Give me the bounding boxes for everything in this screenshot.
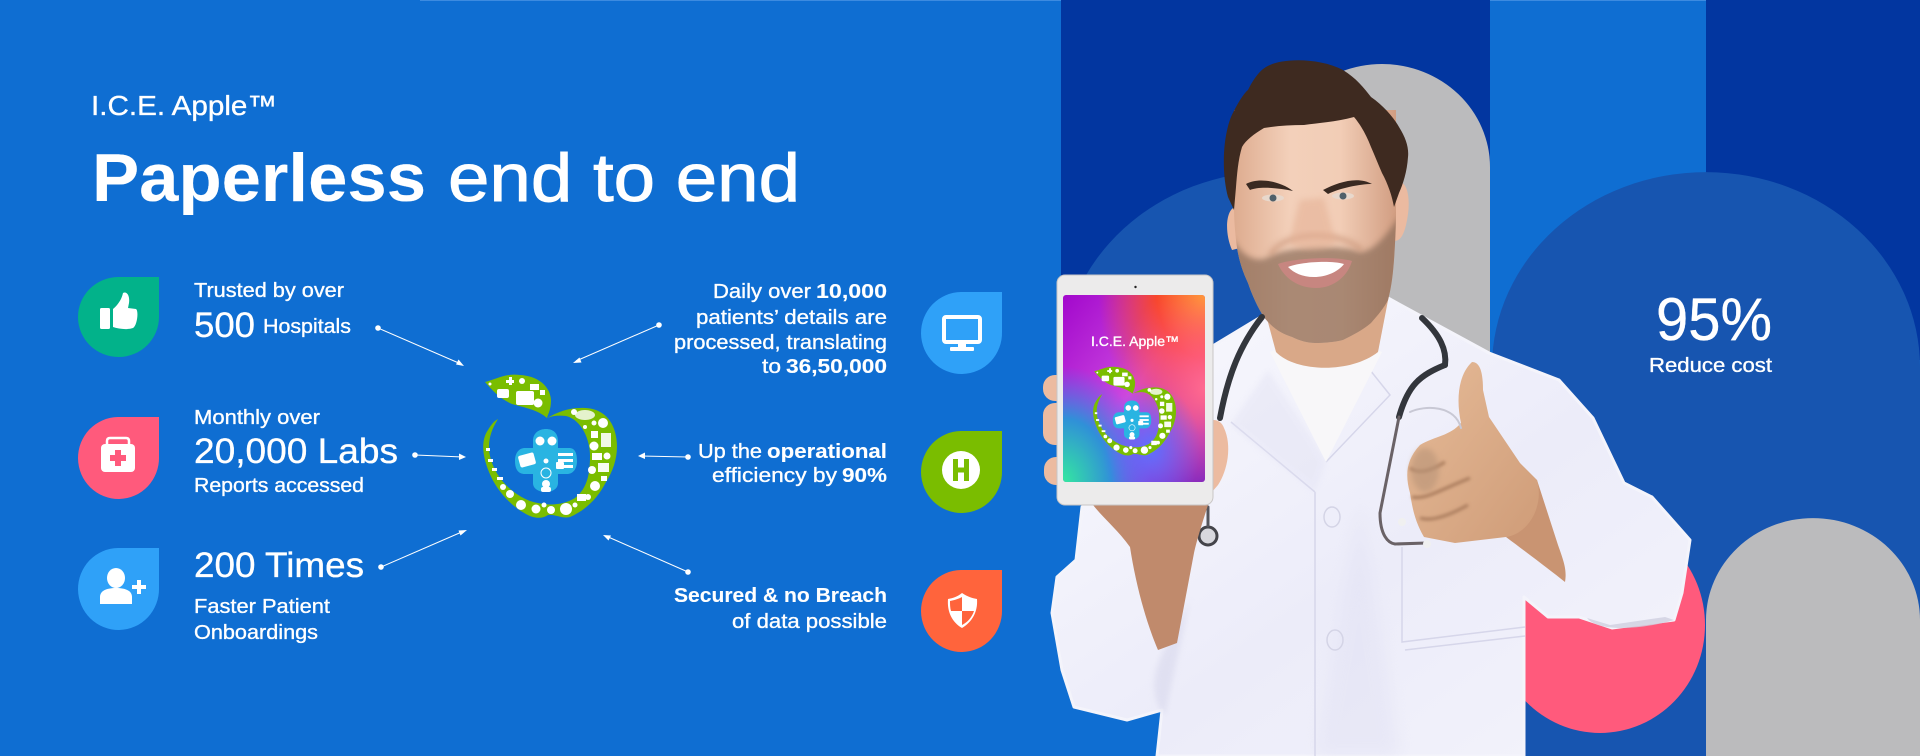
text: operational efficiency: efficiency by: [712, 464, 838, 487]
arrow: labs to apple: [412, 452, 466, 460]
logo: green apple: [483, 375, 617, 518]
text: secured no breach: Secured & no Breach: [674, 584, 887, 607]
text: monthly over 20,000 labs: Reports accessed: [194, 474, 364, 497]
coat: [1052, 298, 1690, 756]
teeth: [1288, 262, 1344, 277]
stat: 95% reduce cost: Reduce cost: [1649, 354, 1772, 377]
arrow: efficiency to apple: [638, 452, 691, 460]
holding forearm: [1093, 505, 1208, 650]
shape: grey arch bottom right: [1706, 518, 1920, 756]
panel: dark blue column right: [1706, 0, 1920, 360]
eyes: [1262, 192, 1354, 202]
text: daily patients processed: 36,50,000: [786, 355, 887, 378]
shape: pink circle: [1495, 517, 1705, 733]
icon: medical kit: [78, 417, 159, 499]
text: trusted by over 500 hospitals: 500: [194, 306, 255, 345]
t-shirt: [1270, 340, 1382, 462]
text: operational efficiency: operational: [767, 440, 887, 463]
icon: monitor: [921, 292, 1002, 374]
tablet title: I.C.E. Apple™: [1091, 333, 1179, 349]
icon: shield: [921, 570, 1002, 652]
arrow: hospitals to apple: [375, 325, 464, 366]
text: daily patients processed: 10,000: [816, 280, 887, 303]
text: daily patients processed: Daily over: [713, 280, 811, 303]
text: daily patients processed: [674, 280, 887, 378]
title: [92, 140, 800, 216]
text: trusted by over 500 hospitals: Trusted by over: [194, 279, 344, 302]
neck: [1262, 290, 1390, 368]
text: trusted by over 500 hospitals: [194, 279, 351, 345]
text: operational efficiency: [698, 440, 887, 487]
text: trusted by over 500 hospitals: Hospitals: [263, 315, 351, 338]
mouth: [1278, 258, 1352, 288]
title: Paperless: [92, 140, 426, 216]
text: operational efficiency: Up the: [698, 440, 762, 463]
shape: medium blue arch behind doctor: [1061, 172, 1488, 480]
title: end to end: [448, 140, 800, 216]
fingers behind tablet: [1043, 375, 1228, 500]
icon: thumbs up: [78, 277, 159, 357]
top highlight strip: [420, 0, 1920, 1]
text: secured no breach: [674, 584, 887, 633]
text: daily patients processed: to: [762, 355, 781, 378]
stubble: [1236, 218, 1396, 343]
hair: [1224, 60, 1408, 210]
arrow: secured to apple: [603, 535, 691, 575]
subtitle: I.C.E. Apple™: [91, 90, 277, 121]
photo: doctor: [1043, 60, 1690, 756]
stat: 95% reduce cost: 95%: [1656, 286, 1772, 353]
text: monthly over 20,000 labs: [194, 406, 398, 497]
tablet apple logo: [1093, 367, 1176, 456]
stethoscope: [1199, 317, 1461, 548]
text: 200 times faster: [194, 546, 364, 644]
text: secured no breach: of data possible: [732, 610, 887, 633]
text: daily patients processed: processed, translating: [674, 331, 887, 354]
text: operational efficiency: 90%: [842, 464, 887, 487]
shape: grey arch behind head: [1274, 64, 1490, 420]
thumbs-up hand: [1407, 362, 1539, 543]
panel: dark blue column left: [1061, 0, 1490, 480]
tablet screen: [1063, 295, 1205, 482]
shape: medium blue arch right: [1492, 172, 1920, 756]
text: 200 times faster: Onboardings: [194, 621, 318, 644]
face: [1230, 105, 1400, 350]
icon: hospital H: [921, 431, 1002, 513]
tablet: [1057, 275, 1213, 505]
text: monthly over 20,000 labs: 20,000 Labs: [194, 432, 398, 471]
cheek and nose shading: [1270, 236, 1362, 255]
eyebrows: [1246, 180, 1372, 194]
ears: [1227, 182, 1409, 250]
text: 200 times faster: 200 Times: [194, 546, 364, 585]
arrow: patients to apple: [573, 322, 662, 363]
text: monthly over 20,000 labs: Monthly over: [194, 406, 320, 429]
stat: 95% reduce cost: [1649, 286, 1772, 377]
text: daily patients processed: patients’ details are: [696, 306, 887, 329]
text: 200 times faster: Faster Patient: [194, 595, 330, 618]
right wrist: [1506, 470, 1566, 582]
icon: add patient: [78, 548, 159, 630]
arrow: onboarding to apple: [378, 530, 467, 570]
